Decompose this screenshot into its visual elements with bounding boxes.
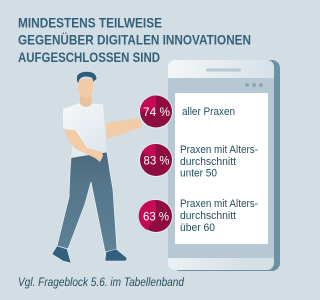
trousers	[57, 152, 117, 252]
smartphone	[168, 60, 280, 271]
hair	[77, 71, 97, 84]
left arm	[64, 130, 103, 162]
title: AUFGESCHLOSSEN SIND	[18, 50, 160, 65]
title	[18, 16, 251, 65]
label: practices under 50: Praxen mit Alters-	[180, 144, 258, 156]
shirt	[63, 103, 107, 158]
neck	[80, 94, 92, 107]
screen	[175, 93, 268, 244]
label: practices under 50: durchschnitt	[180, 156, 236, 168]
person	[52, 71, 142, 263]
label: practices under 50: unter 50	[180, 168, 217, 180]
speaker	[206, 68, 241, 72]
label: practices over 60: über 60	[180, 222, 215, 234]
left shoe	[52, 246, 71, 263]
label: practices under 50	[180, 144, 258, 180]
label: all practices: aller Praxen	[182, 106, 235, 118]
title: GEGENÜBER DIGITALEN INNOVATIONEN	[18, 33, 251, 48]
stat: 63 percent: 63 %	[143, 210, 169, 224]
label: practices over 60	[180, 198, 258, 234]
stat: 74 percent: 74 %	[143, 105, 170, 119]
stat: 83 percent: 83 %	[144, 154, 170, 168]
footnote: Vgl. Frageblock 5.6. im Tabellenband	[18, 277, 185, 289]
head	[78, 78, 93, 98]
stat: 63 percent	[139, 199, 173, 233]
camera dots	[245, 83, 263, 87]
stat: 74 percent	[139, 94, 173, 128]
label: practices over 60: durchschnitt	[180, 210, 236, 222]
right shoe	[105, 249, 127, 261]
right arm	[106, 118, 142, 139]
label: practices over 60: Praxen mit Alters-	[180, 198, 258, 210]
stat: 83 percent	[139, 143, 173, 177]
title: MINDESTENS TEILWEISE	[18, 16, 162, 30]
